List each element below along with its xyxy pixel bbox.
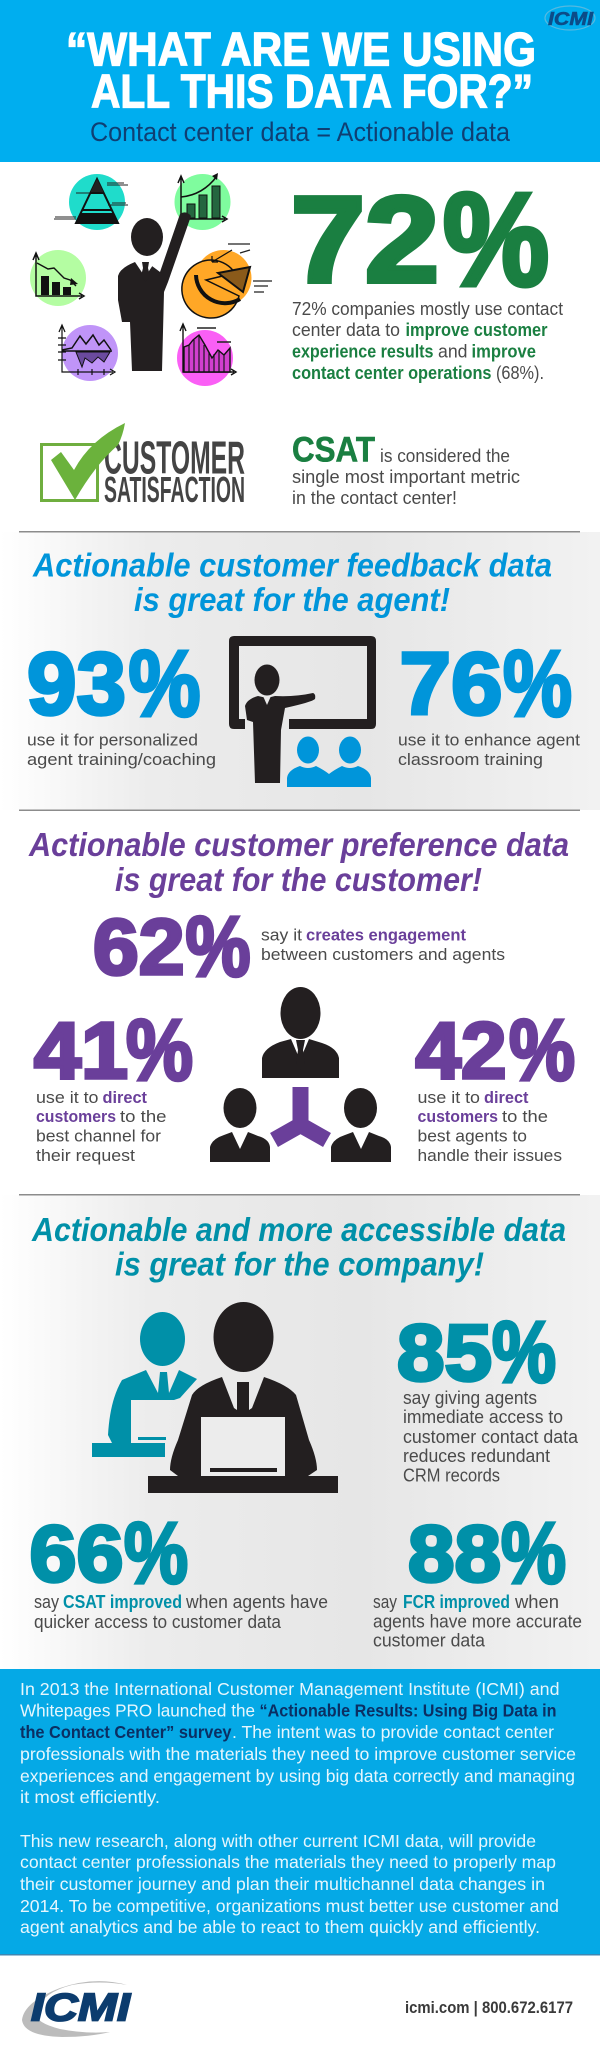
title: “WHAT ARE WE USING	[66, 22, 536, 76]
stat: 62%	[93, 900, 250, 995]
stat: 93%: %	[128, 631, 200, 736]
illustration: businessman with charts	[30, 173, 272, 386]
text: 42% label: to the	[502, 1107, 548, 1126]
stat: 93%: 93	[27, 634, 126, 733]
logo: customer satisfaction	[42, 423, 245, 510]
icon: pyramid chart	[54, 174, 128, 230]
stat: 42%: %	[509, 1003, 575, 1099]
text block: 72% description: (68%).	[496, 363, 544, 383]
stat: 76%	[400, 631, 572, 736]
text block: paragraph one: experiences and engagement by using big data correctly and managing	[20, 1766, 575, 1786]
text: 41% label: use it to	[36, 1088, 98, 1107]
heading: Actionable and more accessible data	[31, 1211, 566, 1248]
text: 42% label: use it to	[418, 1088, 480, 1107]
stat: 76%: %	[503, 631, 572, 736]
heading: Actionable customer feedback data	[32, 546, 552, 584]
stat: 93%	[27, 631, 200, 736]
text: 93% label: use it for personalized	[27, 730, 198, 750]
text: 66% label	[34, 1592, 328, 1632]
text block: paragraph two	[20, 1831, 559, 1937]
text block: paragraph two: contact center professionals the materials they need to properly map	[20, 1852, 556, 1872]
text: 62% label	[261, 926, 505, 964]
stat: 41%: 41	[34, 1006, 128, 1095]
stat: 66%: 66	[30, 1509, 124, 1598]
text block: 72% description: experience results	[292, 342, 434, 362]
icon: pie chart	[182, 244, 272, 318]
text: 66% label: quicker access to customer data	[34, 1612, 282, 1632]
text block: 72% description: improve	[472, 342, 536, 362]
logo: customer satisfaction: CUSTOMER	[104, 432, 245, 484]
text: 88% label: agents have more accurate	[373, 1612, 582, 1632]
text: 88% label: when	[514, 1592, 559, 1612]
text: 41% label: to the	[120, 1107, 166, 1126]
text block: paragraph one	[20, 1679, 576, 1807]
stat: 62%: %	[186, 900, 250, 995]
text block: CSAT: CSAT	[292, 430, 375, 470]
text: 88% label: customer data	[373, 1630, 486, 1650]
heading: is great for the agent!	[134, 581, 450, 618]
text: 42% label: direct	[484, 1088, 529, 1107]
text: 42% label: customers	[418, 1107, 498, 1126]
text: 42% label: handle their issues	[418, 1146, 562, 1165]
text block: CSAT	[292, 430, 520, 508]
heading: Actionable customer preference data	[28, 826, 569, 863]
stat: 41%	[34, 1003, 193, 1099]
stat: 85%: %	[492, 1305, 556, 1401]
text block: paragraph one: professionals with the materials they need to improve customer service	[20, 1744, 576, 1764]
stat: 88%: %	[501, 1506, 566, 1602]
logo: ICMI: ICMI	[31, 1986, 131, 2030]
text block: paragraph one: . The intent was to provide contact center	[232, 1722, 554, 1742]
text: 42% label	[418, 1088, 562, 1165]
text block: paragraph one: In 2013 the International Customer Management Institute (ICMI) and	[20, 1679, 560, 1699]
stat: 42%: 42	[416, 1006, 506, 1095]
heading	[28, 826, 569, 898]
text: 85% label: say giving agents	[403, 1388, 537, 1408]
icon: line area chart	[58, 325, 118, 381]
icon: falling bar chart	[30, 250, 86, 306]
text: 62% label: creates engagement	[306, 926, 466, 944]
text block: 72% description: contact center operations	[292, 363, 492, 383]
stat: 85%: 85	[397, 1308, 492, 1397]
text: 76% label	[398, 730, 580, 769]
text: 88% label	[373, 1592, 582, 1650]
text block: paragraph two: This new research, along with other current ICMI data, will provide	[20, 1831, 536, 1851]
icon: trainer at board with audience	[229, 636, 376, 787]
icon: two people at laptops	[92, 1302, 338, 1493]
stat: 62%: 62	[93, 902, 184, 991]
text block: CSAT: in the contact center!	[292, 488, 457, 508]
text block: paragraph two: their customer journey and plan their multichannel data changes in	[20, 1874, 545, 1894]
stat: 76%: 76	[400, 634, 502, 733]
text: 85% label: CRM records	[403, 1466, 500, 1486]
text: 41% label: their request	[36, 1146, 135, 1165]
icon: three people network	[210, 987, 391, 1162]
text: 41% label: direct	[102, 1088, 147, 1107]
text block: CSAT: single most important metric	[292, 467, 520, 487]
text: 93% label	[27, 730, 216, 769]
text block: paragraph one: it most efficiently.	[20, 1787, 160, 1807]
text: 42% label: best agents to	[418, 1126, 527, 1146]
text block: paragraph two: agent analytics and be able to react to them quickly and efficiently.	[20, 1917, 540, 1937]
text block: 72% description	[292, 299, 563, 383]
text: 76% label: use it to enhance agent	[398, 730, 580, 750]
text: 66% label: CSAT improved	[63, 1592, 182, 1612]
logo: customer satisfaction: SATISFACTION	[104, 469, 245, 510]
contact line: icmi.com | 800.672.6177	[405, 1999, 573, 2017]
stat: 42%	[416, 1003, 575, 1099]
panel: customer	[28, 826, 575, 1165]
icon: businessman	[118, 212, 191, 371]
icon: rising bar chart	[174, 173, 230, 230]
stat: 66%	[30, 1506, 188, 1602]
text block: paragraph one: the Contact Center” survey	[20, 1722, 232, 1742]
heading: is great for the customer!	[115, 861, 482, 898]
text: 66% label: when agents have	[185, 1592, 328, 1612]
text: 66% label: say	[34, 1592, 59, 1612]
panel: agent	[0, 531, 600, 811]
stat: 88%	[408, 1506, 566, 1602]
big stat: 72%: %	[443, 166, 549, 313]
text: 41% label: best channel for	[36, 1126, 161, 1146]
text: 41% label	[36, 1088, 166, 1165]
icon: small ICMI logo	[545, 6, 595, 30]
text: 76% label: classroom training	[398, 750, 543, 769]
text block: paragraph two: 2014. To be competitive, organizations must better use customer and	[20, 1896, 559, 1916]
text block: paragraph one: Whitepages PRO launched the	[20, 1700, 255, 1720]
heading	[31, 1211, 566, 1282]
text block: 72% description: center data to	[292, 320, 400, 340]
heading	[32, 546, 552, 618]
big stat: 72%: 72	[291, 172, 439, 308]
text: 85% label: immediate access to	[403, 1407, 563, 1427]
title: ALL THIS DATA FOR?”	[91, 64, 533, 118]
header banner	[0, 0, 600, 162]
big stat: 72%	[291, 166, 549, 313]
stat: 85%	[397, 1305, 556, 1401]
subtitle: Contact center data = Actionable data	[90, 117, 511, 147]
text block: 72% description: and	[438, 342, 468, 362]
stat: 66%: %	[124, 1506, 188, 1602]
text: 93% label: agent training/coaching	[27, 750, 216, 769]
icon: mountain bar chart	[177, 324, 236, 386]
text block: 72% description: 72% companies mostly use contact	[292, 299, 563, 319]
logo: ICMI	[22, 1981, 131, 2037]
heading: is great for the company!	[115, 1246, 484, 1282]
panel: company	[0, 1194, 600, 1669]
title	[66, 22, 536, 118]
text: 62% label: say it	[261, 926, 302, 944]
text: 41% label: customers	[36, 1107, 116, 1126]
panel: about the survey	[0, 1669, 600, 1956]
text block: paragraph one: “Actionable Results: Using Big Data in	[260, 1700, 556, 1720]
text block: CSAT: is considered the	[380, 446, 510, 466]
text: 85% label: reduces redundant	[403, 1446, 550, 1466]
text block: 72% description: improve customer	[406, 320, 548, 340]
icon: small ICMI logo: ICMI	[548, 9, 594, 29]
text: 88% label: FCR improved	[403, 1592, 510, 1612]
text: 88% label: say	[373, 1592, 397, 1612]
stat: 88%: 88	[408, 1509, 501, 1598]
stat: 41%: %	[126, 1003, 193, 1099]
text: 85% label	[403, 1388, 579, 1486]
text: 62% label: between customers and agents	[261, 945, 505, 964]
text: 85% label: customer contact data	[403, 1427, 579, 1447]
